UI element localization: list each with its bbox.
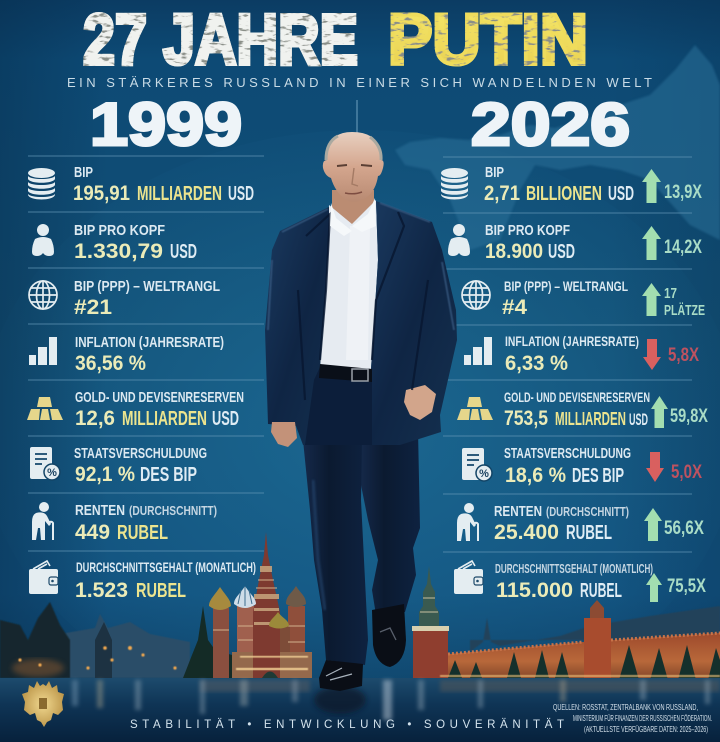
value: RUBEL bbox=[117, 522, 168, 544]
value: 449 bbox=[75, 520, 110, 544]
value: USD bbox=[212, 408, 239, 430]
figure: head bbox=[323, 132, 384, 202]
panel: 1999 bbox=[27, 164, 256, 602]
value bbox=[496, 578, 622, 602]
row: Inflation 2026 bbox=[464, 333, 699, 375]
value: 115.000 bbox=[496, 578, 573, 602]
label: INFLATION (JAHRESRATE) bbox=[505, 333, 639, 349]
figure: shirt bbox=[320, 200, 378, 369]
kremlin: background buildings bbox=[470, 606, 720, 652]
value: #21 bbox=[74, 295, 112, 319]
cathedral: main tower bbox=[253, 532, 280, 678]
label: (DURCHSCHNITT) bbox=[129, 503, 217, 518]
arrow up bbox=[642, 226, 661, 260]
icon: wallet bbox=[29, 561, 58, 594]
change: 13,9X bbox=[664, 182, 702, 203]
icon: globe bbox=[29, 281, 57, 309]
icon: gold bars bbox=[27, 397, 63, 420]
skyline: left city bbox=[0, 602, 190, 678]
icon: bars bbox=[29, 337, 57, 365]
value bbox=[75, 578, 186, 602]
arrow up bbox=[644, 508, 662, 541]
change: 14,2X bbox=[664, 237, 702, 258]
value: 18,6 % bbox=[505, 463, 566, 487]
row: Durchschnittsgehalt 2026 bbox=[454, 561, 706, 602]
change: 59,8X bbox=[670, 406, 708, 427]
change: 75,5X bbox=[667, 576, 706, 597]
label bbox=[494, 503, 629, 520]
figure: face features bbox=[337, 165, 372, 166]
change: 56,6X bbox=[664, 518, 704, 539]
value: 18.900 bbox=[485, 239, 543, 263]
icon: wallet bbox=[454, 561, 483, 594]
label: INFLATION (JAHRESRATE) bbox=[75, 334, 224, 351]
value: USD bbox=[629, 410, 648, 429]
value bbox=[494, 520, 612, 544]
arrow up bbox=[642, 169, 661, 203]
icon: person bbox=[448, 224, 470, 256]
row: Renten 2026 bbox=[457, 503, 704, 544]
label: STAATSVERSCHULDUNG bbox=[74, 445, 207, 462]
icon: coins bbox=[28, 168, 55, 200]
year 1999: 1999 bbox=[90, 91, 242, 158]
value: MILLIARDEN bbox=[122, 408, 207, 430]
value: MILLIARDEN bbox=[555, 409, 626, 429]
row: Staatsverschuldung 2026 bbox=[462, 445, 702, 487]
cathedral: bodies bbox=[213, 608, 229, 678]
row: Reserven 1999 bbox=[27, 389, 244, 430]
figure: back shoe bbox=[372, 604, 406, 667]
kremlin: wall bbox=[438, 633, 720, 680]
row: Inflation 1999 bbox=[29, 334, 224, 375]
figure: lapel and sleeve seams bbox=[298, 212, 428, 400]
value bbox=[74, 239, 197, 263]
arrow up bbox=[642, 283, 661, 316]
value: USD bbox=[170, 241, 197, 263]
arrow up bbox=[646, 573, 662, 602]
value: 6,33 % bbox=[505, 351, 568, 375]
row: BIP pro Kopf 2026 bbox=[448, 222, 702, 263]
label: RENTEN bbox=[494, 503, 542, 520]
motto: STABILITÄT • ENTWICKLUNG • SOUVERÄNITÄT bbox=[130, 719, 564, 731]
icon: coins bbox=[441, 168, 468, 200]
label: STAATSVERSCHULDUNG bbox=[504, 445, 631, 462]
value: RUBEL bbox=[566, 522, 612, 544]
figure: hair bbox=[326, 136, 381, 160]
figure: front leg bbox=[303, 440, 368, 665]
value bbox=[505, 463, 624, 487]
value: RUBEL bbox=[136, 580, 186, 602]
figure: back leg bbox=[360, 430, 420, 615]
change: 17 bbox=[664, 285, 677, 302]
value: #4 bbox=[502, 295, 527, 319]
value: 2,71 bbox=[484, 181, 520, 205]
icon: gold bars bbox=[457, 397, 493, 420]
kremlin: far tower bbox=[584, 618, 611, 680]
value bbox=[484, 181, 634, 205]
icon: bars bbox=[464, 337, 492, 365]
value: 92,1 % bbox=[75, 462, 135, 486]
title: 27 JAHRE: 27 JAHRE bbox=[83, 1, 358, 80]
label bbox=[75, 502, 217, 519]
change bbox=[664, 285, 705, 319]
value bbox=[504, 406, 648, 430]
figure: belt bbox=[319, 364, 372, 382]
change: 5,0X bbox=[671, 462, 702, 483]
label: BIP (PPP) – WELTRANGL bbox=[504, 278, 628, 294]
cathedral: trees bbox=[183, 606, 236, 678]
value: 25.400 bbox=[494, 520, 559, 544]
label: DURCHSCHNITTSGEHALT (MONATLICH) bbox=[76, 559, 256, 575]
label: BIP bbox=[485, 164, 504, 181]
value: DES BIP bbox=[140, 464, 197, 486]
value: 12,6 bbox=[75, 406, 115, 430]
value bbox=[75, 406, 239, 430]
icon: person bbox=[32, 224, 54, 256]
row: Staatsverschuldung 1999 bbox=[30, 445, 207, 486]
row: Durchschnittsgehalt 1999 bbox=[29, 559, 256, 602]
figure: jacket left bbox=[265, 207, 338, 445]
kremlin: firs bbox=[448, 645, 720, 680]
value: USD bbox=[228, 183, 254, 205]
row: BIP 1999 bbox=[28, 164, 254, 205]
row: BIP pro Kopf 1999 bbox=[32, 222, 197, 263]
figure: left hand bbox=[271, 422, 297, 447]
label: GOLD- UND DEVISENRESERVEN bbox=[75, 389, 244, 406]
kremlin: Spasskaya tower bbox=[419, 566, 439, 632]
value bbox=[75, 520, 168, 544]
label: (DURCHSCHNITT) bbox=[546, 504, 629, 519]
icon: elder bbox=[457, 503, 478, 541]
row: Reserven 2026 bbox=[457, 389, 708, 430]
Kremlin wall and towers bbox=[412, 566, 720, 680]
icon: document percent bbox=[30, 447, 60, 480]
value: 195,91 bbox=[73, 181, 130, 205]
value: USD bbox=[608, 183, 634, 205]
label: RENTEN bbox=[75, 502, 125, 519]
subtitle: EIN STÄRKERES RUSSLAND IN EINER SICH WANDELNDEN WELT bbox=[67, 75, 652, 90]
icon: globe bbox=[462, 281, 490, 309]
world map silhouette bbox=[395, 45, 720, 250]
label: BIP PRO KOPF bbox=[74, 222, 165, 239]
label: BIP (PPP) – WELTRANGL bbox=[74, 278, 220, 295]
wet ground with reflections bbox=[0, 678, 720, 742]
value bbox=[73, 181, 254, 205]
figure: neck bbox=[332, 190, 374, 232]
label: GOLD- UND DEVISENRESERVEN bbox=[504, 389, 650, 405]
row: Renten 1999 bbox=[32, 502, 217, 544]
value: BILLIONEN bbox=[526, 183, 602, 205]
value bbox=[75, 462, 197, 486]
icon: elder bbox=[32, 502, 53, 540]
St. Basil's Cathedral bbox=[183, 532, 312, 678]
change: 5,8X bbox=[668, 345, 699, 366]
cathedral: domes bbox=[209, 587, 231, 610]
value: 1.523 bbox=[75, 578, 128, 602]
title: PUTIN: PUTIN bbox=[388, 1, 588, 80]
row: BIP 2026 bbox=[441, 164, 702, 205]
figure: collar bbox=[330, 198, 376, 236]
row: Weltrang 1999 bbox=[29, 278, 220, 319]
figure: Putin walking bbox=[265, 132, 457, 691]
arrow down bbox=[646, 452, 664, 482]
title bbox=[83, 1, 588, 80]
year 2026: 2026 bbox=[471, 91, 630, 158]
arrow down bbox=[643, 339, 661, 370]
value: RUBEL bbox=[580, 580, 622, 602]
icon: document percent bbox=[462, 448, 492, 481]
figure: front shoe bbox=[319, 660, 363, 691]
label: BIP bbox=[74, 164, 93, 181]
value: 753,5 bbox=[504, 406, 548, 430]
arrow up bbox=[651, 396, 668, 428]
value: 1.330,79 bbox=[74, 239, 163, 263]
row: Weltrang 2026 bbox=[462, 278, 705, 319]
emblem: Russian eagle bbox=[22, 681, 64, 727]
label: BIP PRO KOPF bbox=[485, 222, 570, 239]
sources bbox=[553, 703, 712, 734]
value: 36,56 % bbox=[75, 351, 146, 375]
figure: right hand bbox=[404, 385, 436, 420]
value: DES BIP bbox=[572, 465, 624, 487]
panel: 2026 bbox=[441, 164, 708, 602]
value: USD bbox=[548, 241, 575, 263]
value: MILLIARDEN bbox=[137, 183, 222, 205]
figure: jacket right bbox=[368, 201, 457, 445]
